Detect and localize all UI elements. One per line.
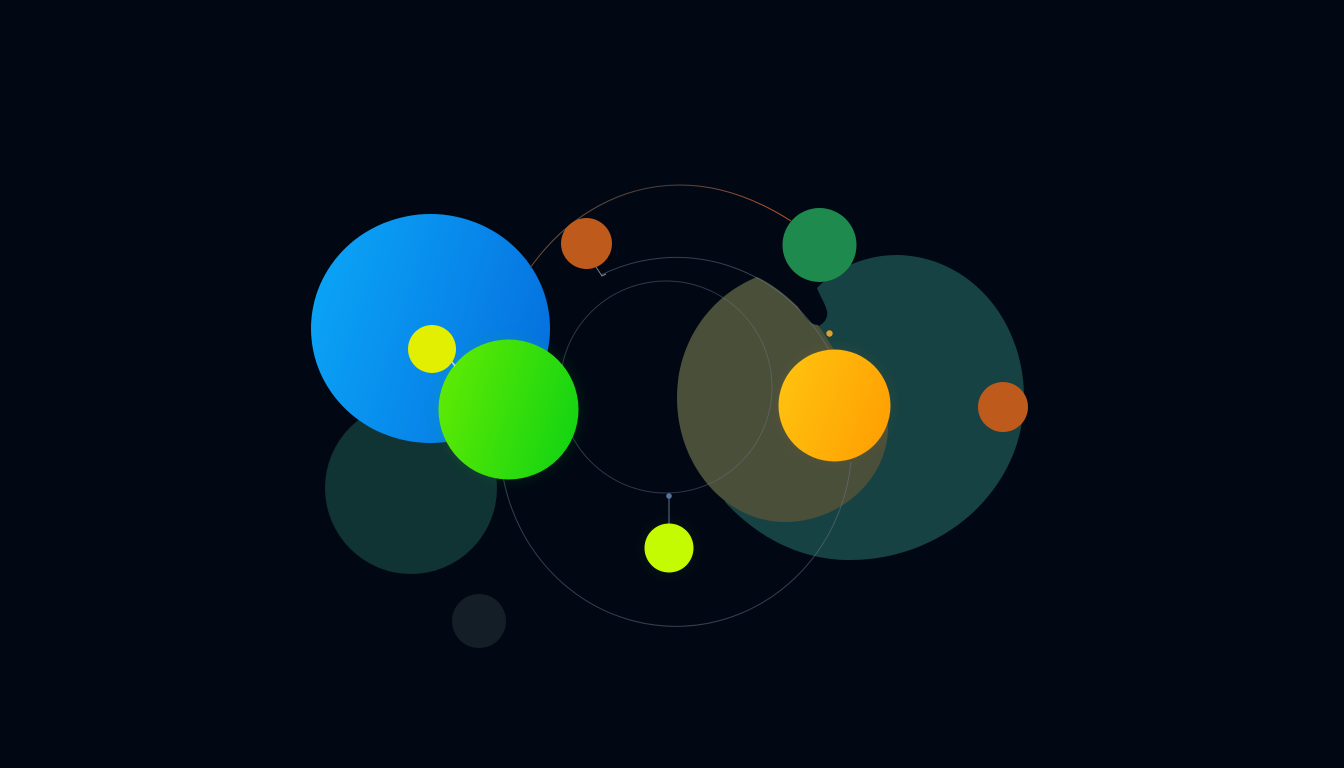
circle: amber: [778, 350, 890, 462]
circle: orange top: [561, 218, 612, 269]
arc: top connector: [530, 185, 791, 268]
node: small amber dot: [826, 330, 833, 337]
glow: lime circle: [644, 524, 694, 572]
connector: yellow to green: [452, 362, 455, 366]
circle: faint grey: [452, 594, 506, 648]
shape: large teal blob: [725, 255, 1024, 560]
connector: orange node to orbit: [596, 267, 606, 276]
ring: inner orbit: [560, 281, 772, 493]
circle: yellow: [408, 325, 456, 373]
circle: dark teal left: [325, 402, 497, 574]
circle: orange right: [978, 382, 1028, 432]
circle: lime: [644, 524, 694, 572]
circle: large blue: [311, 214, 550, 443]
circle: dark green top: [782, 208, 856, 282]
glow: green circle: [438, 338, 580, 480]
ring: outer orbit: [502, 257, 851, 626]
connector: lime node to orbit: [666, 493, 672, 525]
glow: amber circle: [778, 348, 892, 462]
shape: olive overlap circle: [677, 277, 888, 522]
circle: bright green: [438, 340, 578, 480]
